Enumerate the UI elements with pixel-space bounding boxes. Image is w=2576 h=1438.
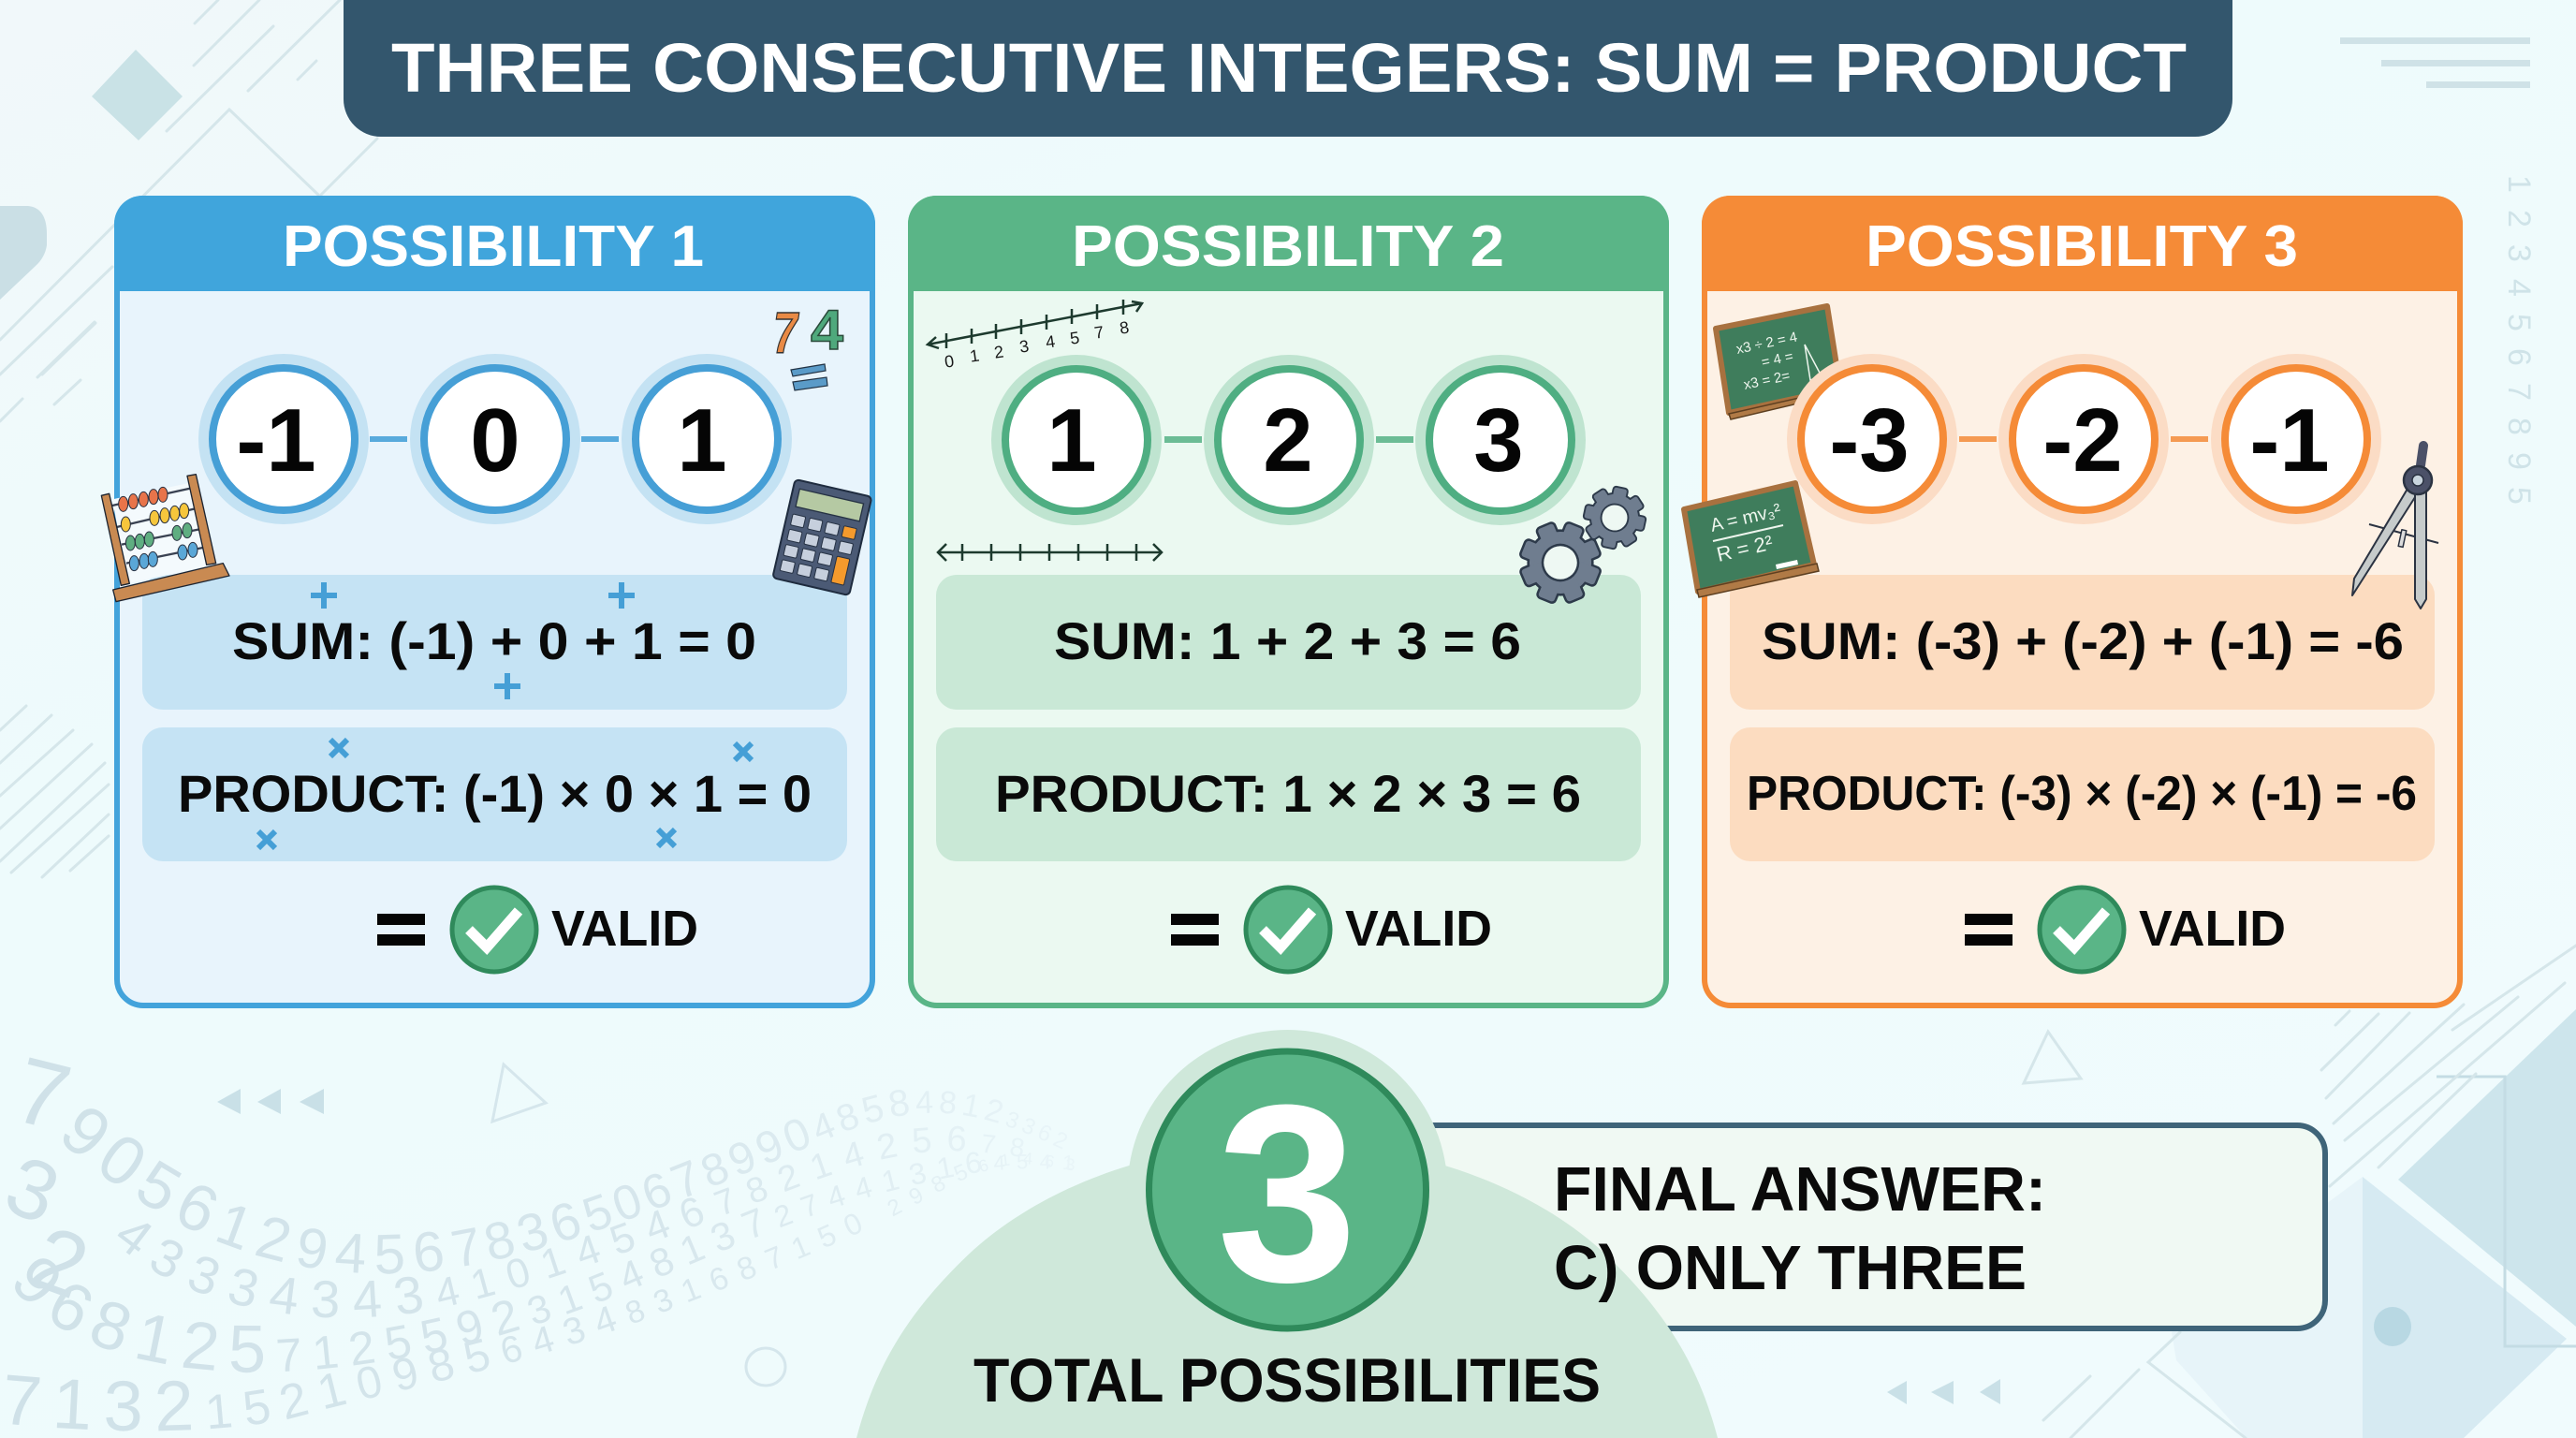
number circle: -1: -1 [2249, 390, 2330, 491]
sum row: SUM: 1 + 2 + 3 = 6 [1054, 611, 1521, 670]
background decoration: top-right lines and digits: 9 [2501, 452, 2537, 470]
background decoration: top-right lines and digits: 4 [2501, 279, 2537, 297]
final answer text [1554, 1154, 2046, 1303]
connector lines [370, 436, 619, 442]
floating plus and times signs [258, 582, 752, 848]
heading: possibility 3: POSSIBILITY 3 [1866, 214, 2298, 279]
icon: floating digits and equals [773, 299, 844, 390]
background decoration: flowing numbers [0, 1037, 1026, 1431]
background decoration: top-right lines and digits: 6 [2501, 348, 2537, 366]
sum row [142, 575, 847, 710]
icon: abacus [101, 475, 229, 602]
background decoration: top-right lines and digits: 1 [2501, 175, 2537, 193]
icon: angled number line: 2 [993, 342, 1005, 362]
product row: PRODUCT: 1 × 2 × 3 = 6 [995, 764, 1581, 823]
icon: chalkboard with equations: = 4 = [1760, 348, 1795, 371]
number circle: -3: -3 [1829, 390, 1910, 491]
icon: chalkboard with equations: x3 = 2= [1742, 368, 1792, 393]
valid row: VALID [551, 901, 698, 957]
background decoration: flowing numbers: 9681257125592315481372744131645413 [15, 1152, 1026, 1372]
number circle: -2 [1998, 354, 2169, 524]
valid row [1965, 888, 2286, 972]
number circle: 0: 0 [470, 390, 520, 491]
valid row [1171, 888, 1492, 972]
number circle: 2: 2 [1263, 390, 1313, 491]
number circle: -1 [2211, 354, 2381, 524]
background decoration: top-left geometry [0, 0, 377, 877]
panel: possibility 2 [908, 196, 1669, 1005]
number circle: -1: -1 [236, 390, 316, 491]
number circle: 2 [1204, 355, 1374, 525]
total possibilities label: TOTAL POSSIBILITIES [973, 1345, 1601, 1415]
heading: possibility 1: POSSIBILITY 1 [283, 214, 704, 279]
valid row: VALID [2139, 901, 2286, 957]
icon: gears [1509, 482, 1650, 614]
number circle: -2: -2 [2042, 390, 2123, 491]
icon: drawing compass [2352, 446, 2438, 609]
icon: angled number line [928, 300, 1142, 372]
product row: PRODUCT: (-3) × (-2) × (-1) = -6 [1747, 767, 2417, 821]
background decoration: top-right lines and digits: 3 [2501, 244, 2537, 262]
final answer text: C) ONLY THREE [1554, 1233, 2027, 1303]
title text: THREE CONSECUTIVE INTEGERS: SUM = PRODUCT [391, 29, 2187, 107]
sum row [936, 575, 1641, 710]
background decoration: top-right lines and digits: 7 [2501, 383, 2537, 401]
icon: horizontal number line [938, 544, 1162, 561]
number circle: -3 [1787, 354, 1957, 524]
icon: angled number line: 7 [1093, 322, 1105, 343]
number circle: 1: 1 [1046, 390, 1097, 491]
icon: calculator [772, 479, 871, 595]
number circle: 1: 1 [677, 390, 727, 491]
background decoration: flowing numbers: 2 [20, 1207, 101, 1318]
icon: floating digits and equals: 4 [811, 299, 844, 361]
product row [1730, 727, 2435, 861]
big number 3: 3 [1217, 1053, 1357, 1335]
total count badge [1127, 1030, 1447, 1350]
panel: possibility 1 [101, 196, 875, 1005]
final answer box [1217, 1125, 2325, 1328]
connector lines [1959, 436, 2208, 442]
product row [142, 727, 847, 861]
number circle: -1 [198, 354, 369, 524]
valid row: VALID [1345, 901, 1492, 957]
sum row [1730, 575, 2435, 710]
icon: angled number line: 1 [969, 345, 981, 366]
product row [936, 727, 1641, 861]
icon: angled number line: 4 [1045, 331, 1057, 352]
background decoration: flowing numbers: 7132152109856434831687150 29856146334 [7, 1154, 1009, 1431]
number circle: 0 [410, 354, 580, 524]
icon: chalkboard with equations [1716, 306, 1841, 419]
number circle: 3: 3 [1473, 390, 1524, 491]
number circle: 3 [1415, 355, 1586, 525]
title banner [344, 0, 2232, 137]
icon: angled number line: 8 [1119, 317, 1131, 338]
background decoration: top-right lines and digits: 8 [2501, 418, 2537, 435]
background decoration: top-right lines and digits: 5 [2501, 314, 2537, 331]
background decoration: flowing numbers: 9056129456783650678990485848123362 [64, 1090, 1024, 1274]
background decoration: top-right lines and digits [2340, 37, 2537, 505]
icon: chalkboard with equations: x3 ÷ 2 = 4 [1734, 330, 1799, 358]
icon: angled number line: 5 [1069, 328, 1081, 348]
sum row: SUM: (-3) + (-2) + (-1) = -6 [1762, 611, 2404, 670]
valid row [377, 888, 698, 972]
icon: chalkboard with formula: R = 2² [1715, 531, 1775, 566]
icon: floating digits and equals: 7 [773, 301, 799, 366]
final answer text: FINAL ANSWER: [1554, 1154, 2046, 1225]
green mound behind the total [856, 1142, 1718, 1438]
icon: angled number line: 3 [1018, 336, 1031, 357]
icon: chalkboard with formula [1684, 483, 1819, 597]
connector lines [1164, 436, 1413, 443]
icon: angled number line: 0 [944, 351, 956, 372]
sum row: SUM: (-1) + 0 + 1 = 0 [232, 611, 756, 670]
number circle: 1 [991, 355, 1162, 525]
background decoration: top-right lines and digits: 2 [2501, 210, 2537, 227]
panel: possibility 3 [1684, 196, 2463, 1005]
heading: possibility 2: POSSIBILITY 2 [1072, 214, 1504, 279]
background decoration: top-right lines and digits: 5 [2501, 487, 2537, 505]
background decoration: bottom-right geometry [1887, 946, 2576, 1438]
number circle: 1 [622, 354, 792, 524]
background decoration: flowing numbers: 7 [5, 1037, 80, 1152]
icon: chalkboard with formula: A = mv₃² [1708, 500, 1783, 536]
product row: PRODUCT: (-1) × 0 × 1 = 0 [178, 764, 812, 823]
